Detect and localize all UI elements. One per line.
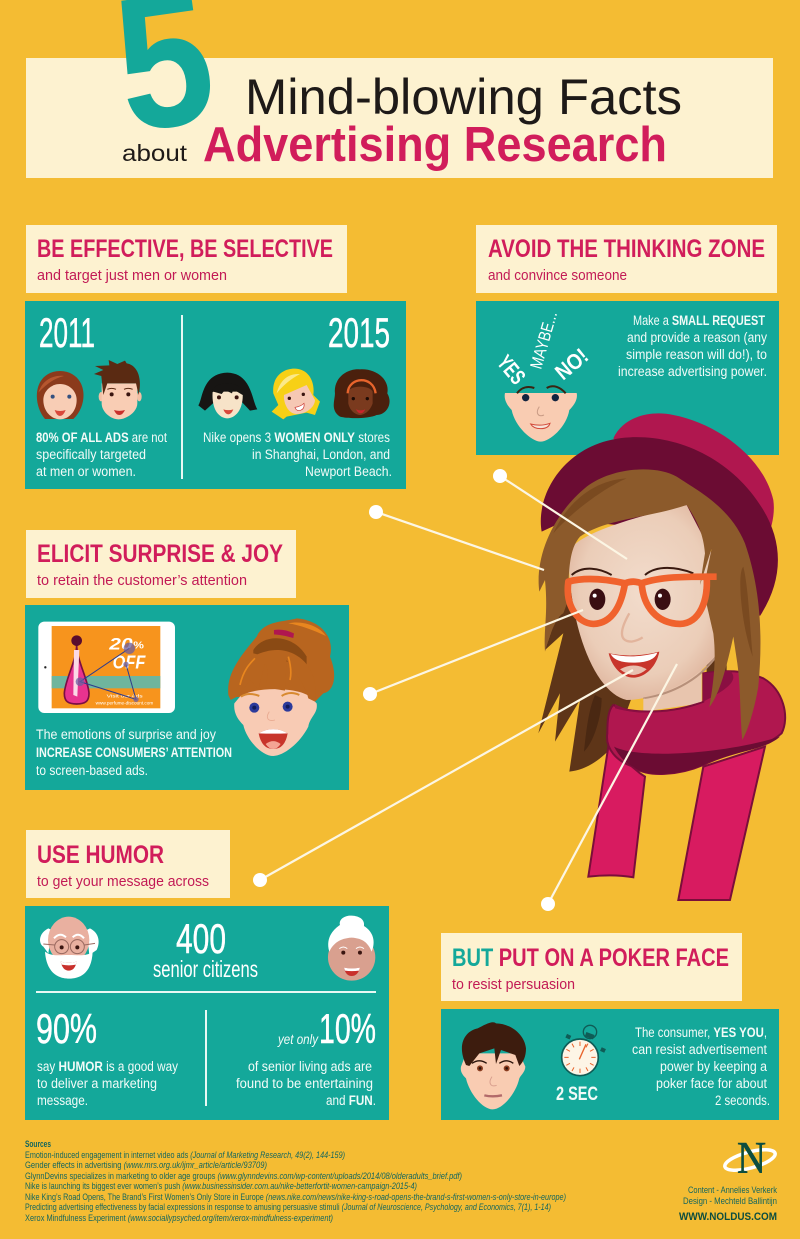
- title line two: Advertising Research: [203, 118, 667, 172]
- heading: be effective: and target just men or women: [37, 267, 227, 284]
- text: poker face: The consumer, YES YOU,: [635, 1025, 767, 1040]
- heading: use humor: to get your message across: [37, 873, 209, 890]
- callout lines: [253, 469, 677, 911]
- credits: [679, 1185, 777, 1223]
- year 2011: 2011: [39, 309, 95, 356]
- stat: 90 percent: [36, 1005, 178, 1108]
- callout: selective: [369, 505, 544, 570]
- text: 2015: in Shanghai, London, and: [252, 447, 390, 462]
- stat: 90 percent: 90%: [36, 1005, 97, 1052]
- icon: tablet with eye-tracked ad: %: [133, 640, 144, 651]
- heading: be effective: BE EFFECTIVE, BE SELECTIVE: [37, 235, 333, 263]
- icon: tablet with eye-tracked ad: 20: [108, 634, 134, 653]
- icon: tablet with eye-tracked ad: www.perfume-discount.com: [96, 700, 154, 705]
- text: small request: [618, 313, 767, 379]
- heading: avoid the thinking zone: [476, 225, 777, 293]
- text: 2011: at men or women.: [36, 464, 136, 479]
- stat: 10 percent: found to be entertaining: [236, 1076, 373, 1091]
- icon: bald grandfather: [40, 917, 99, 979]
- text: surprise and joy: [36, 727, 232, 778]
- scarf wrap: [607, 671, 785, 774]
- stat: 10 percent: and FUN.: [326, 1093, 376, 1108]
- callout: poker face: [541, 664, 677, 911]
- credits: Content - Annelies Verkerk: [688, 1185, 777, 1196]
- thought words: NO!: [550, 343, 593, 385]
- logo: Noldus N: [723, 1133, 777, 1183]
- callout: humor: [253, 670, 633, 887]
- title block: [26, 0, 773, 178]
- stat: 90 percent: say HUMOR is a good way: [37, 1059, 178, 1074]
- hair front: [539, 469, 760, 740]
- text: surprise and joy: INCREASE CONSUMERS’ ATTENTION: [36, 745, 232, 760]
- icon: open-head face: [505, 386, 577, 442]
- stat: 10 percent: [236, 1005, 376, 1108]
- glasses: [568, 577, 717, 624]
- hat crown: [613, 413, 774, 540]
- heading: elicit surprise and joy: to retain the customer’s attention: [37, 572, 247, 589]
- text: surprise and joy: The emotions of surprise and joy: [36, 727, 216, 742]
- label 2 sec: 2 SEC: [556, 1084, 598, 1105]
- text: poker face: power by keeping a: [660, 1059, 767, 1074]
- icon: woman brown hair: [37, 371, 84, 419]
- hat brim: [541, 437, 778, 616]
- neck: [643, 667, 702, 712]
- text: poker face: [632, 1025, 770, 1108]
- heading: poker face: [441, 933, 742, 1001]
- callout: surprise: [363, 610, 583, 701]
- callout: thinking zone: [493, 469, 627, 559]
- icon: stopwatch: [562, 1025, 606, 1076]
- icons: five faces: [37, 360, 390, 419]
- icon: woman black hair: [198, 373, 257, 418]
- thought words: [492, 309, 593, 389]
- heading: poker face: BUT PUT ON A POKER FACE: [452, 944, 729, 972]
- text: 2015: Newport Beach.: [305, 464, 392, 479]
- stat: 90 percent: to deliver a marketing: [37, 1076, 157, 1091]
- mouth: [609, 652, 659, 678]
- stat: 10 percent: yet only: [277, 1032, 319, 1047]
- text: poker face: poker face for about: [656, 1076, 767, 1091]
- text: 2011: specifically targeted: [36, 447, 146, 462]
- icon: tablet with eye-tracked ad: Visit our Ads: [107, 694, 143, 699]
- icon: woman blonde hair: [272, 369, 320, 419]
- text: surprise and joy: to screen-based ads.: [36, 763, 148, 778]
- scarf tails: [588, 747, 645, 877]
- heading: avoid the thinking zone: and convince someone: [488, 267, 627, 284]
- title line one: Mind-blowing Facts: [245, 69, 682, 125]
- icon: surprised girl: [228, 618, 334, 756]
- text: poker face: 2 seconds.: [715, 1093, 770, 1108]
- panel: avoid the thinking zone: [476, 301, 779, 455]
- logo: Noldus N: N: [737, 1133, 766, 1183]
- thought words: YES: [492, 350, 531, 389]
- heading: be effective: [26, 225, 347, 293]
- heading: elicit surprise and joy: [26, 530, 296, 598]
- stat: 10 percent: 10%: [319, 1005, 376, 1052]
- credits: WWW.NOLDUS.COM: [679, 1211, 777, 1223]
- nose: [622, 613, 643, 642]
- panel: use humor: [25, 906, 389, 1120]
- sources: Gender effects in advertising (www.mrs.org.uk/ijmr_article/article/93709): [25, 1160, 267, 1171]
- icon: woman dark curly hair: [334, 369, 390, 418]
- text: 2015: [203, 430, 392, 479]
- heading: use humor: USE HUMOR: [37, 841, 164, 869]
- credits: Design - Mechteld Ballintijn: [683, 1196, 777, 1207]
- panel: poker face: [441, 1009, 779, 1120]
- text: poker face: can resist advertisement: [632, 1042, 767, 1057]
- sources: Emotion-induced engagement in internet video ads (Journal of Marketing Research, 49(2), 144-159): [25, 1150, 345, 1161]
- icon: man spiky hair: [94, 360, 142, 419]
- character: woman with hat and scarf: [538, 413, 785, 900]
- thought words: MAYBE...: [527, 309, 561, 371]
- icon: tablet with eye-tracked ad: [38, 622, 175, 713]
- text: 2011: [36, 430, 167, 479]
- sources: Predicting advertising effectiveness by facial expressions in response to amusing persuasive stimuli (Journal of Neuroscience, Psychology, and Economics, 7(1), 1-14): [25, 1202, 551, 1213]
- text: 2011: 80% OF ALL ADS are not: [36, 430, 167, 445]
- eyebrows: [572, 568, 693, 575]
- panel: surprise and joy: [25, 605, 349, 790]
- text: small request: increase advertising power.: [618, 364, 767, 379]
- stat: 10 percent: of senior living ads are: [248, 1059, 372, 1074]
- year 2015: 2015: [328, 309, 390, 356]
- icon: grandmother: [328, 916, 375, 981]
- icon: tablet with eye-tracked ad: OFF: [113, 651, 146, 672]
- text: small request: Make a SMALL REQUEST: [633, 313, 766, 328]
- heading: use humor: [26, 830, 230, 898]
- text: 2015: Nike opens 3 WOMEN ONLY stores: [203, 430, 390, 445]
- text: small request: simple reason will do!), to: [626, 347, 767, 362]
- sources: Xerox Mindfulness Experiment (www.sociallypsyched.org/item/xerox-mindfulness-experiment): [25, 1213, 333, 1224]
- title word about: about: [122, 140, 188, 166]
- label senior citizens: senior citizens: [153, 956, 258, 982]
- hair back: [538, 587, 633, 772]
- heading: elicit surprise and joy: ELICIT SURPRISE & JOY: [37, 540, 283, 568]
- panel: be effective: [25, 301, 406, 489]
- text: small request: and provide a reason (any: [627, 330, 767, 345]
- sources: Nike King’s Road Opens, The Brand’s First Women’s Only Store in Europe (news.nike.com/news/nike-king-s-road-opens-the-brand-s-first-women-s-only-store-in-europe): [25, 1192, 566, 1203]
- heading: poker face: to resist persuasion: [452, 976, 575, 993]
- stat: 90 percent: message.: [37, 1093, 88, 1108]
- eyes: [589, 589, 605, 610]
- sources: Sources: [25, 1139, 51, 1150]
- number 400: 400: [176, 915, 226, 962]
- sources: Nike is launching its biggest ever women’s push (www.businessinsider.com.au/nike-betterfortit-women-campaign-2015-4): [25, 1181, 417, 1192]
- icon: poker-faced man: [461, 1022, 526, 1109]
- sources: GlynnDevins specializes in marketing to older age groups (www.glynndevins.com/wp-content/uploads/2014/08/olderadults_brief.pdf): [25, 1171, 462, 1182]
- sources: [25, 1139, 566, 1224]
